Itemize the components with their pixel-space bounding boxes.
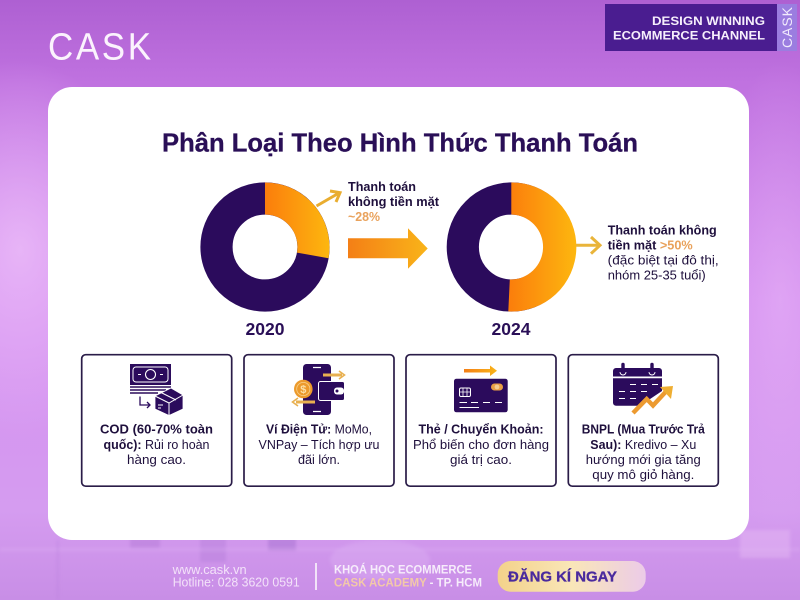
text: card transfer (413, 422, 549, 467)
footer: contact: www.cask.vn (172, 563, 247, 577)
text: COD (100, 422, 213, 467)
banner: design winning ecommerce channel: CASK (779, 6, 795, 48)
text: e-wallet: đãi lớn. (298, 452, 340, 467)
text: BNPL: hướng mới gia tăng (586, 452, 701, 467)
icon: calendar with rising arrow (613, 364, 673, 413)
banner: design winning ecommerce channel (605, 4, 797, 51)
title: Phân Loại Theo Hình Thức Thanh Toán (162, 128, 638, 158)
text: COD: quốc): Rủi ro hoàn (104, 437, 210, 452)
label: 2020 cashless share: Thanh toán (348, 179, 416, 194)
label: 2024 cashless share: (đặc biệt tại đô thị, (608, 252, 719, 268)
arrow: 2020 callout (316, 191, 340, 206)
footer: course (334, 562, 482, 590)
text: card transfer: Thẻ / Chuyển Khoản: (418, 422, 544, 436)
text: card transfer: giá trị cao. (450, 452, 512, 467)
panel: card transfer (406, 355, 556, 486)
button: register (498, 561, 646, 592)
panel: COD (82, 355, 232, 486)
logo: CASK: CASK (48, 25, 151, 68)
icon: phone wallet (292, 364, 344, 415)
arrow: 2024 callout (576, 237, 600, 254)
label: 2024 cashless share (608, 222, 719, 282)
label: year 2024: 2024 (492, 319, 531, 339)
text: e-wallet: Ví Điện Tử: MoMo, (266, 422, 372, 436)
chart: donut 2020 (216, 182, 329, 296)
label: 2020 cashless share: ~28% (348, 209, 380, 224)
footer: contact: Hotline: 028 3620 0591 (173, 576, 300, 590)
text: e-wallet (258, 422, 380, 467)
label: 2020 cashless share (348, 179, 440, 224)
text: COD: hàng cao. (127, 452, 186, 467)
label: 2024 cashless share: tiền mặt >50% (608, 238, 693, 252)
label: 2024 cashless share: nhóm 25-35 tuổi) (608, 268, 706, 282)
text: BNPL: BNPL (Mua Trước Trả (582, 422, 706, 436)
text: BNPL: quy mô giỏ hàng. (592, 467, 694, 482)
arrow: 2020 to 2024 (348, 228, 428, 269)
text: BNPL: Sau): Kredivo – Xu (590, 437, 696, 452)
text: BNPL (582, 422, 706, 482)
footer: course: KHOÁ HỌC ECOMMERCE (334, 562, 472, 576)
label: 2020 cashless share: không tiền mặt (348, 194, 440, 209)
footer: divider (315, 563, 317, 590)
text: COD: COD (60-70% toàn (100, 422, 213, 436)
banner: design winning ecommerce channel: ECOMMERCE CHANNEL (613, 28, 765, 42)
label: 2024 cashless share: Thanh toán không (608, 222, 717, 238)
footer: course: CASK ACADEMY - TP. HCM (334, 576, 482, 590)
chart: donut 2024 (463, 182, 576, 311)
icon: bank card (454, 366, 508, 412)
button: register: ĐĂNG KÍ NGAY (508, 568, 617, 586)
text: card transfer: Phổ biến cho đơn hàng (413, 437, 549, 452)
panel: BNPL (568, 355, 718, 486)
icon: cash and parcel (130, 364, 183, 416)
panel: main white card (48, 87, 749, 540)
banner: design winning ecommerce channel: DESIGN WINNING (652, 14, 765, 28)
panel: e-wallet (244, 355, 394, 486)
label: year 2020: 2020 (246, 319, 285, 339)
text: e-wallet: VNPay – Tích hợp ưu (258, 437, 380, 452)
footer: contact (172, 563, 300, 590)
icon: phone wallet: $ (300, 384, 306, 396)
